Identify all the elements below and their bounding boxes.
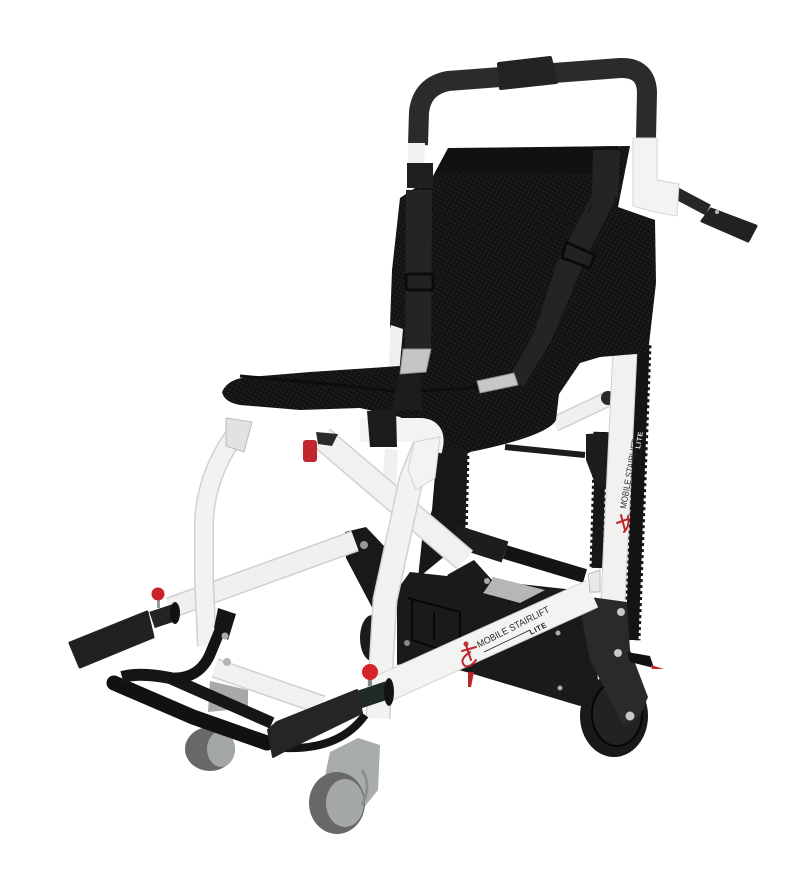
box bolts [556,630,560,636]
right upright tube lower [613,350,625,600]
right rear track [632,345,643,640]
left strap slider [406,274,433,290]
right red knob [362,664,378,686]
brace end joint [447,560,492,592]
rear brake [627,652,664,669]
back cushion [390,146,656,403]
seat [222,362,560,452]
rear bracket [586,433,610,488]
cross rod under seat [505,447,585,455]
battery box [397,572,600,706]
right silver buckle [477,373,518,393]
X brace tube [322,438,465,560]
footrest right curve [285,715,365,748]
top grip [499,58,556,88]
rear caster [185,681,248,771]
inner right track [597,432,601,568]
left rear post [388,325,403,375]
main lower tube [380,594,592,690]
back centre panel [435,146,618,175]
rear wheel plate [581,597,648,727]
front right leg [378,440,427,718]
battery label [483,577,545,603]
left track [418,440,468,578]
upright logo wording: MOBILE STAIRLIFT [618,438,640,509]
front caster [309,738,380,834]
right upright with handle bracket [633,138,679,216]
upright LITE: LITE [635,431,645,449]
footrest loop [114,608,365,748]
logo figure [462,642,476,666]
upper bracket on front leg [408,437,440,490]
centre belt drop [392,375,422,410]
lower base tube to caster [215,658,322,705]
joint bolt [588,570,600,592]
red seat knob [303,440,317,462]
small back wheel [360,615,384,661]
left upright stub [408,143,425,165]
logo LITE: LITE [528,621,548,637]
seat front rail [360,409,434,462]
logo on right upright [617,431,645,532]
long diagonal base tube [170,541,355,608]
seat strap [367,409,397,447]
logo on lower tube [462,604,552,666]
top handle bar [418,58,647,145]
pivot plate [345,527,384,615]
left seat bracket [226,418,252,452]
right strap slider [562,242,595,268]
back white seat rail bracket left [382,448,398,490]
left shoulder strap [406,163,433,350]
left grip [70,602,180,667]
battery latch [408,598,460,652]
logo underline [484,630,530,652]
rear push handle [676,193,756,241]
brake lever red [468,672,474,687]
rear cross tube [455,536,585,576]
left curved leg [204,428,240,646]
upright logo figure [617,515,628,532]
rear seat strut [555,391,615,424]
logo wording: MOBILE STAIRLIFT [475,604,552,651]
lap belt [240,376,490,392]
left silver buckle [400,349,431,374]
left red knob [152,588,164,608]
right shoulder strap [510,150,620,382]
right grip [268,678,394,757]
footrest arm [170,618,225,678]
rear wheel [580,675,648,757]
seat pivot [316,432,338,446]
